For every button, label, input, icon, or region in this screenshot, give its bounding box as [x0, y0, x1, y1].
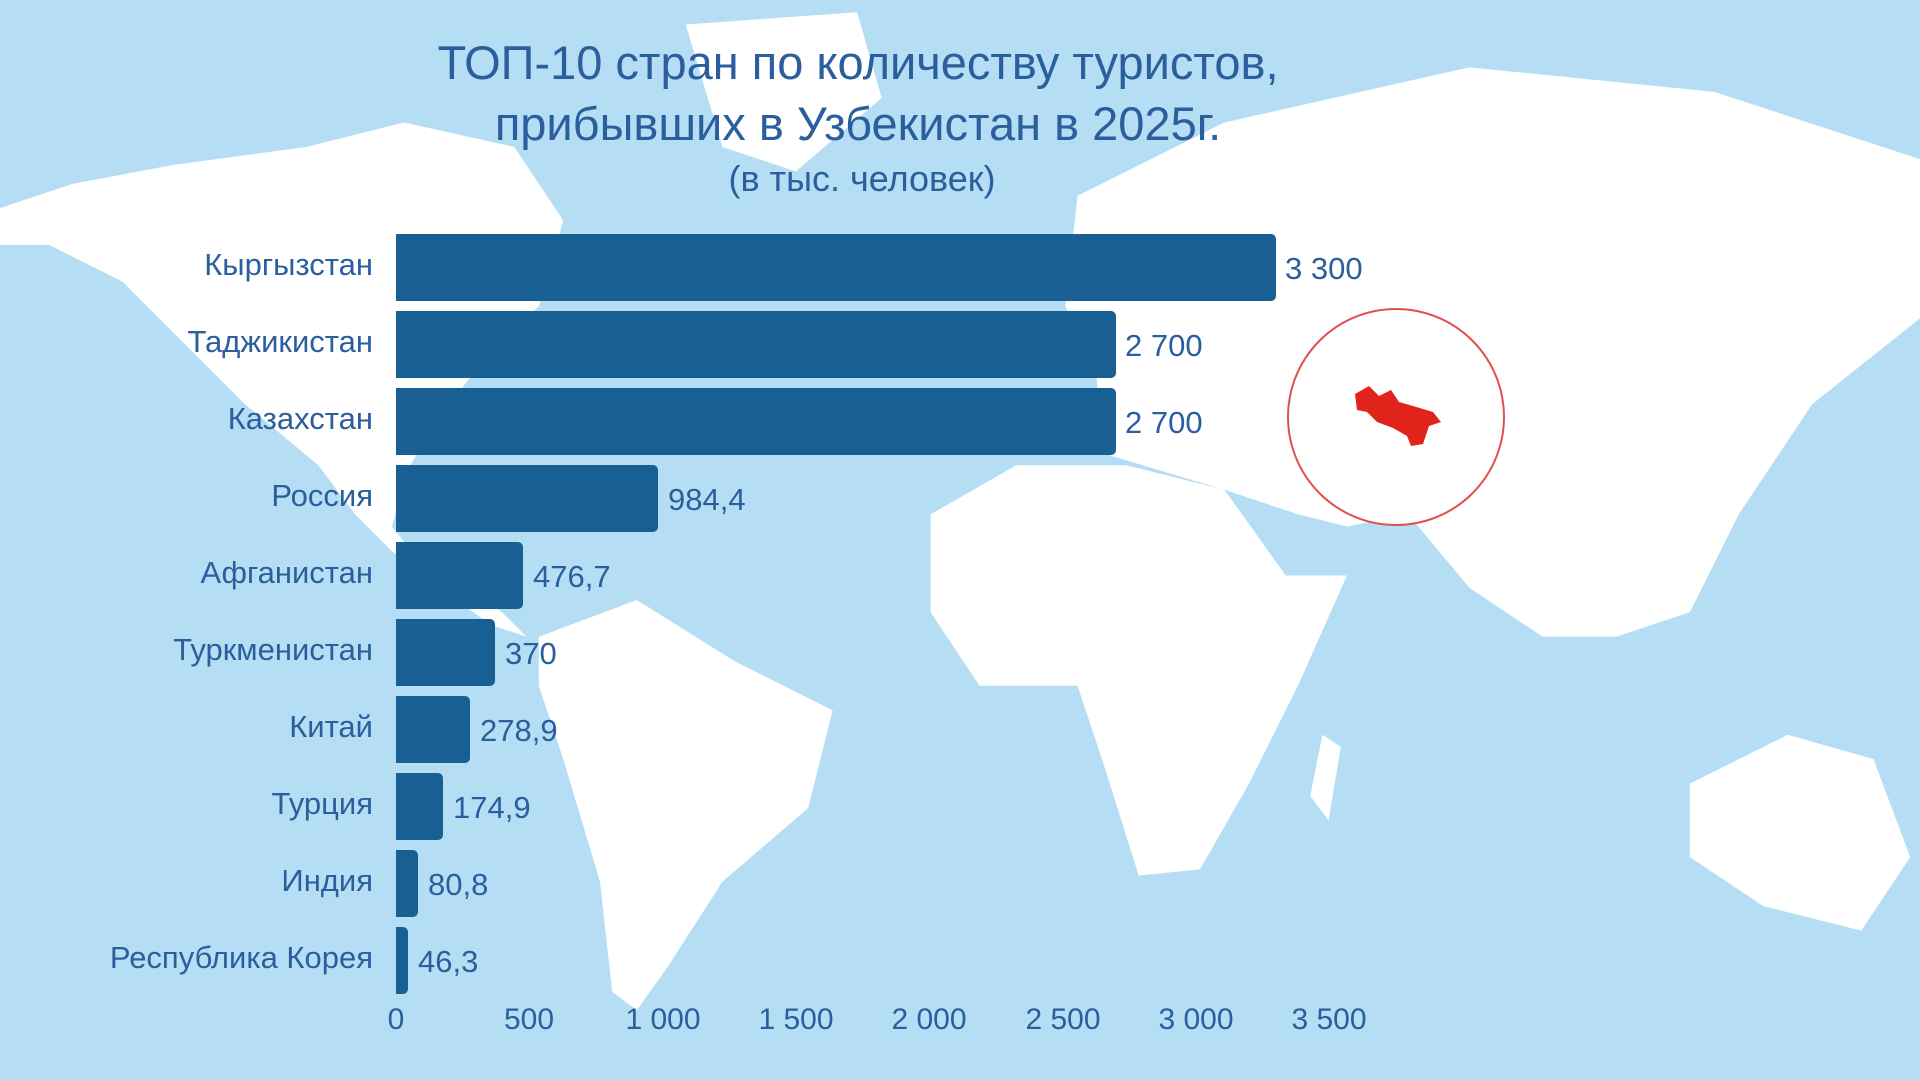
- callout: uzbekistan circle: [1287, 308, 1505, 526]
- title: ТОП-10 стран по количеству туристов,: [438, 36, 1278, 89]
- title: [438, 36, 1278, 150]
- bar chart: 1 500: [758, 1003, 834, 1036]
- bar chart: Турция: [272, 786, 373, 821]
- bar chart: 2 700: [1125, 405, 1203, 440]
- bar chart: Казахстан: [228, 401, 373, 436]
- bar chart: 80,8: [428, 867, 488, 902]
- bar chart: 500: [504, 1003, 554, 1036]
- bar chart: 476,7: [533, 559, 611, 594]
- south america: [539, 600, 833, 1010]
- bar chart: 2 000: [891, 1003, 967, 1036]
- greenland: [686, 12, 882, 171]
- bar chart: Республика Корея: [110, 940, 373, 975]
- subtitle: (в тыс. человек): [728, 158, 995, 199]
- bar chart: Китай: [289, 709, 373, 744]
- africa: [931, 465, 1347, 876]
- bar chart: 1 000: [625, 1003, 701, 1036]
- icon: uzbekistan shape: [1355, 386, 1441, 446]
- values: 3 300: [1285, 251, 1363, 286]
- eurasia: [1065, 67, 1920, 637]
- bar chart: 984,4: [668, 482, 746, 517]
- bar chart: Туркменистан: [173, 632, 373, 667]
- title: прибывших в Узбекистан в 2025г.: [495, 97, 1221, 150]
- bar chart: 2 700: [1125, 328, 1203, 363]
- labels: Кыргызстан: [204, 247, 373, 282]
- bar chart: Афганистан: [200, 555, 373, 590]
- australia: [1690, 735, 1910, 931]
- bar chart: Таджикистан: [187, 324, 373, 359]
- x axis: 0: [388, 1003, 404, 1036]
- bar chart: 370: [505, 636, 557, 671]
- bar chart: 3 000: [1158, 1003, 1234, 1036]
- bar chart: Россия: [271, 478, 373, 513]
- bar chart: Индия: [281, 863, 373, 898]
- bar chart: 278,9: [480, 713, 558, 748]
- bar chart: 46,3: [418, 944, 478, 979]
- bars: [396, 234, 1276, 301]
- bar chart: 174,9: [453, 790, 531, 825]
- bar chart: 2 500: [1025, 1003, 1101, 1036]
- north america: [0, 122, 563, 637]
- bar chart: 3 500: [1291, 1003, 1367, 1036]
